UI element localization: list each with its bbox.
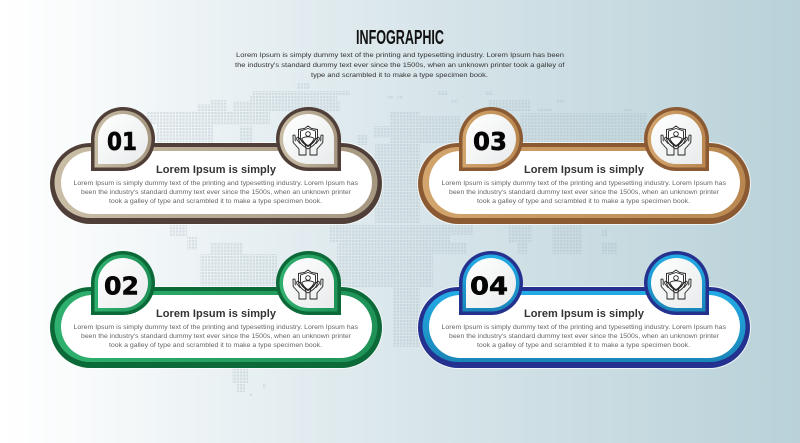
heading: Lorem Ipsum is simply xyxy=(156,164,277,176)
icon badge: shield and hands xyxy=(276,251,341,315)
heading: Lorem Ipsum is simply xyxy=(524,308,645,320)
heading: Lorem Ipsum is simply xyxy=(524,164,645,176)
body text: Lorem Ipsum is simply dummy text of the printing and typesetting industry. Lorem Ipsum has xyxy=(442,324,726,331)
body text: been the industry's standard dummy text ever since the 1500s, when an unknown printer xyxy=(81,333,352,340)
panel: 04 xyxy=(417,251,751,369)
number badge xyxy=(91,107,155,171)
body text: been the industry's standard dummy text ever since the 1500s, when an unknown printer xyxy=(81,189,352,196)
body text: Lorem Ipsum is simply dummy text of the printing and typesetting industry. Lorem Ipsum has xyxy=(442,180,726,187)
icon badge: shield and hands xyxy=(644,107,709,171)
panel: 03 xyxy=(417,107,751,225)
heading: Lorem Ipsum is simply xyxy=(156,308,277,320)
body text xyxy=(74,180,358,205)
body text: took a galley of type and scrambled it to make a type specimen book. xyxy=(477,342,690,349)
body text xyxy=(442,180,726,205)
body text xyxy=(74,324,358,349)
body text: took a galley of type and scrambled it to make a type specimen book. xyxy=(109,198,322,205)
body text: been the industry's standard dummy text ever since the 1500s, when an unknown printer xyxy=(449,189,720,196)
dotted world map xyxy=(147,83,647,396)
body text: Lorem Ipsum is simply dummy text of the printing and typesetting industry. Lorem Ipsum has xyxy=(74,180,358,187)
intro text xyxy=(235,52,565,79)
body text: Lorem Ipsum is simply dummy text of the printing and typesetting industry. Lorem Ipsum has xyxy=(74,324,358,331)
number badge xyxy=(459,107,523,171)
icon badge: shield and hands xyxy=(276,107,341,171)
intro text: type and scrambled it to make a type specimen book. xyxy=(311,72,488,79)
body text: took a galley of type and scrambled it to make a type specimen book. xyxy=(477,198,690,205)
title: INFOGRAPHIC xyxy=(356,26,444,49)
body text: been the industry's standard dummy text ever since the 1500s, when an unknown printer xyxy=(449,333,720,340)
pill frame xyxy=(49,286,383,369)
intro text: Lorem Ipsum is simply dummy text of the printing and typesetting industry. Lorem Ipsum has been xyxy=(236,52,564,59)
number badge xyxy=(91,251,155,315)
pill frame xyxy=(417,142,751,225)
number badge: 03 xyxy=(473,127,507,156)
intro text: the industry's standard dummy text ever since the 1500s, when an unknown printer took a galley of xyxy=(235,62,565,69)
pill frame xyxy=(417,286,751,369)
panel: 02 xyxy=(49,251,383,369)
body text: took a galley of type and scrambled it to make a type specimen book. xyxy=(109,342,322,349)
pill frame xyxy=(49,142,383,225)
number badge xyxy=(459,251,523,315)
icon badge: shield and hands xyxy=(644,251,709,315)
body text xyxy=(442,324,726,349)
number badge: 04 xyxy=(470,272,508,300)
number badge: 02 xyxy=(104,272,139,300)
panel: 01 xyxy=(49,107,383,225)
number badge: 01 xyxy=(107,127,137,156)
